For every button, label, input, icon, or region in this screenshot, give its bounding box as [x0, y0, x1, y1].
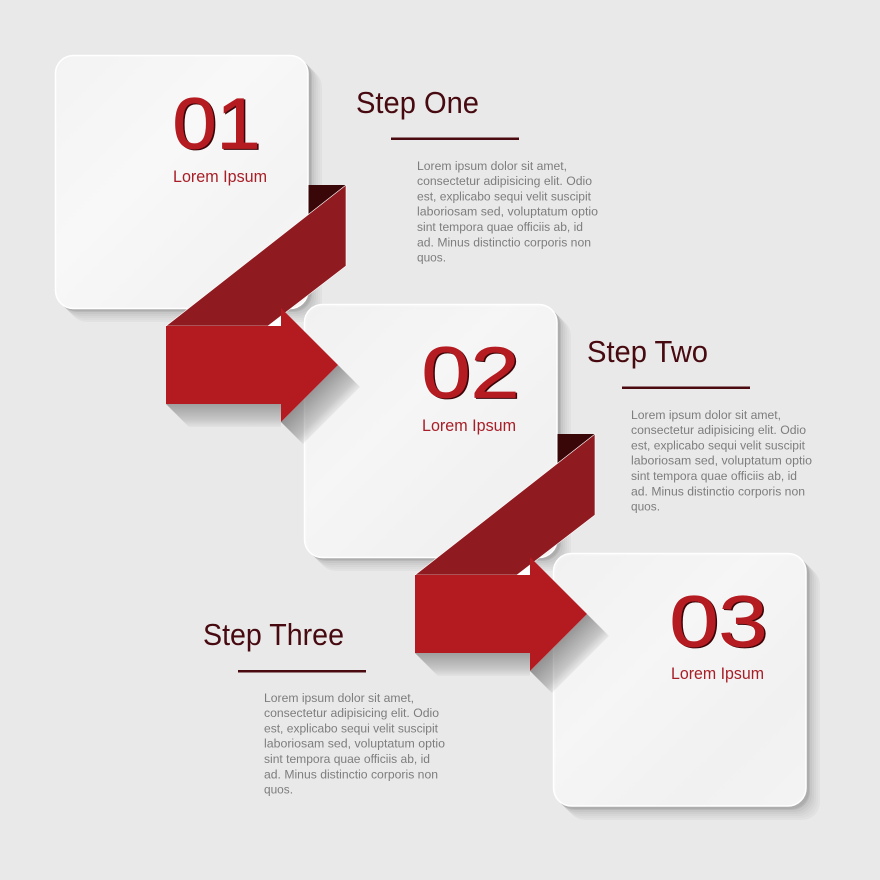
ribbon arrow 1 — [166, 185, 360, 444]
number 01: 01 — [174, 85, 262, 166]
ribbon notch — [517, 564, 531, 575]
body text: sint tempora quae officiis ab, id — [264, 752, 430, 766]
body text: ad. Minus distinctio corporis non — [417, 235, 591, 249]
step two text — [587, 334, 815, 514]
body text: quos. — [631, 500, 660, 514]
body text: Lorem ipsum dolor sit amet, — [417, 159, 567, 173]
ribbon band — [415, 434, 595, 575]
body text: sint tempora quae officiis ab, id — [631, 469, 797, 483]
card 2 — [304, 304, 571, 571]
number 03: 03 — [670, 583, 768, 663]
body text: ad. Minus distinctio corporis non — [631, 484, 805, 498]
ribbon notch — [268, 315, 282, 326]
arrow 2 shadow — [415, 614, 609, 693]
number 01: 01 — [172, 84, 261, 165]
ribbon arrow 2 — [415, 434, 609, 693]
body text: laboriosam sed, voluptatum optio — [264, 737, 445, 751]
arrow body — [415, 557, 587, 671]
body text: Lorem ipsum dolor sit amet, — [631, 408, 781, 422]
body text: quos. — [264, 782, 293, 796]
card 2 panel — [304, 304, 557, 558]
card 1 panel — [56, 56, 308, 308]
body text: laboriosam sed, voluptatum optio — [631, 454, 812, 468]
card 1 — [56, 56, 322, 322]
body text: ad. Minus distinctio corporis non — [264, 767, 438, 781]
card 3 — [554, 554, 820, 820]
label Lorem Ipsum 3: Lorem Ipsum — [671, 664, 764, 683]
card 1 shadow — [58, 58, 322, 322]
ribbon fold back — [308, 185, 346, 214]
heading Step Two: Step Two — [587, 334, 708, 369]
arrow body — [166, 308, 338, 422]
body text: consectetur adipisicing elit. Odio — [417, 174, 592, 188]
ribbon band — [166, 185, 346, 326]
number 01: 01 — [172, 84, 261, 165]
card 3 shadow — [556, 556, 820, 820]
rule — [391, 138, 519, 140]
body text: laboriosam sed, voluptatum optio — [417, 205, 598, 219]
ribbon fold back — [558, 434, 595, 463]
body text: est, explicabo sequi velit suscipit — [631, 438, 806, 452]
body text: sint tempora quae officiis ab, id — [417, 220, 583, 234]
heading Step One: Step One — [356, 85, 479, 120]
arrow 1 shadow — [166, 365, 360, 444]
body text: est, explicabo sequi velit suscipit — [264, 721, 439, 735]
number 02: 02 — [423, 334, 521, 415]
label Lorem Ipsum 1: Lorem Ipsum — [173, 167, 267, 186]
number 02: 02 — [422, 334, 520, 414]
card 3 panel — [554, 554, 806, 806]
body text: quos. — [417, 250, 446, 264]
body text: consectetur adipisicing elit. Odio — [631, 423, 806, 437]
step three text — [203, 617, 448, 796]
label Lorem Ipsum 2: Lorem Ipsum — [422, 416, 516, 435]
number 03: 03 — [671, 583, 769, 664]
step one text — [356, 85, 601, 264]
heading Step Three: Step Three — [203, 617, 344, 652]
body text: Lorem ipsum dolor sit amet, — [264, 691, 414, 705]
number 03: 03 — [670, 582, 768, 663]
rule — [238, 670, 366, 672]
card 2 shadow — [307, 307, 571, 571]
body text: consectetur adipisicing elit. Odio — [264, 706, 439, 720]
rule — [622, 386, 750, 389]
body text: est, explicabo sequi velit suscipit — [417, 189, 592, 203]
number 02: 02 — [422, 333, 520, 414]
